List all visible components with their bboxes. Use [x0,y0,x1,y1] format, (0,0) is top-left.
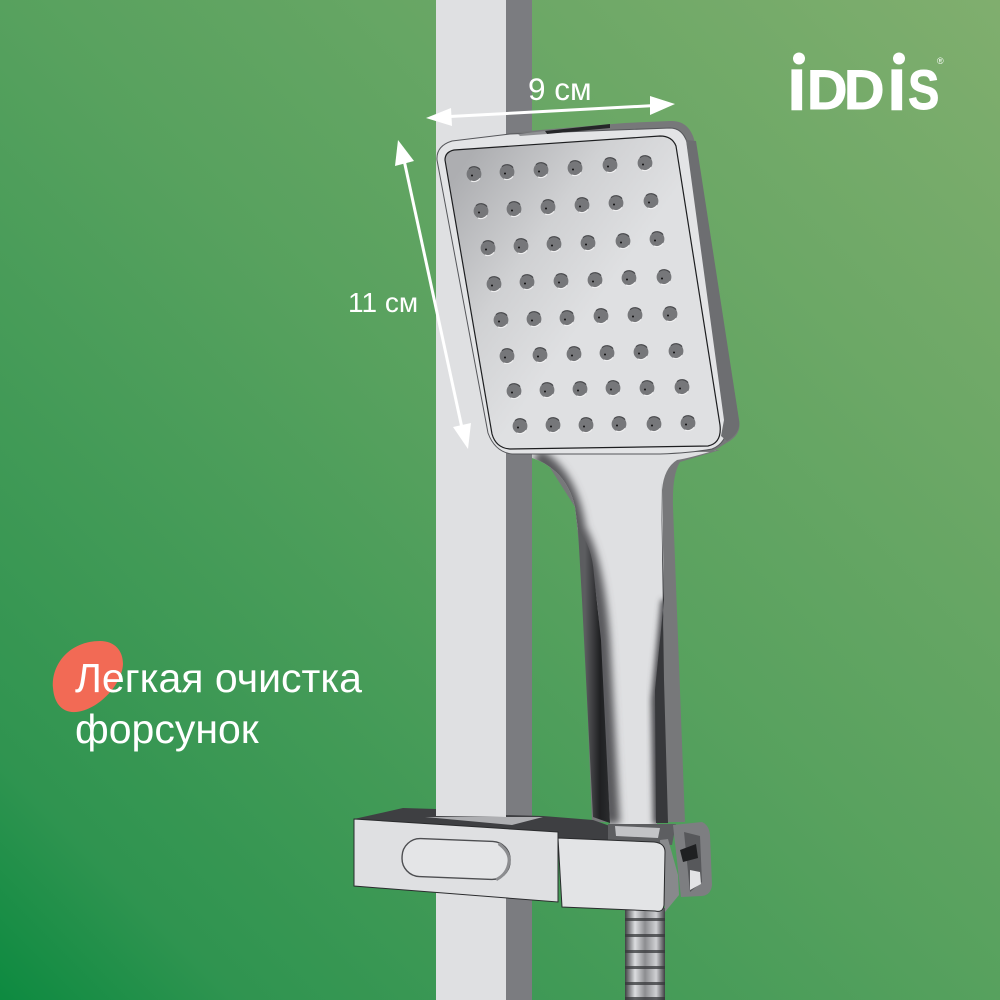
dimension arrow: width [426,96,675,126]
shower rail [436,0,532,1000]
handle dark shell [540,450,720,822]
logo: ® [937,56,944,66]
wall bracket [354,808,712,912]
accent blob [53,641,123,712]
logo: D [807,58,847,121]
logo: I [789,58,805,121]
nozzle grid [467,156,695,434]
bracket top [354,808,660,842]
handle chrome body [532,450,716,824]
logo: I [889,58,905,121]
head rear shell [470,121,740,452]
caption: Легкая очистка [75,655,362,701]
hook clip [673,822,712,897]
dimension label: 11 см: 11 см [348,287,418,318]
head face plate [445,136,720,449]
handle left dark band [578,530,610,823]
right block side [660,839,679,912]
logo [789,52,944,121]
dimension label: 9 см: 9 см [528,71,592,107]
shower head [437,121,740,454]
dimension arrow: height [395,140,471,449]
swivel neck [608,824,676,845]
right block front [558,838,665,911]
head chrome rim [437,128,727,454]
handle shading [536,456,666,824]
shower handle [532,450,720,824]
logo: S [908,58,939,121]
hose [625,908,665,1000]
logo: D [844,58,884,121]
left block [354,819,558,902]
caption: форсунок [75,706,260,752]
caption [75,655,362,752]
release button [401,838,511,880]
handle right dark band [655,480,668,823]
